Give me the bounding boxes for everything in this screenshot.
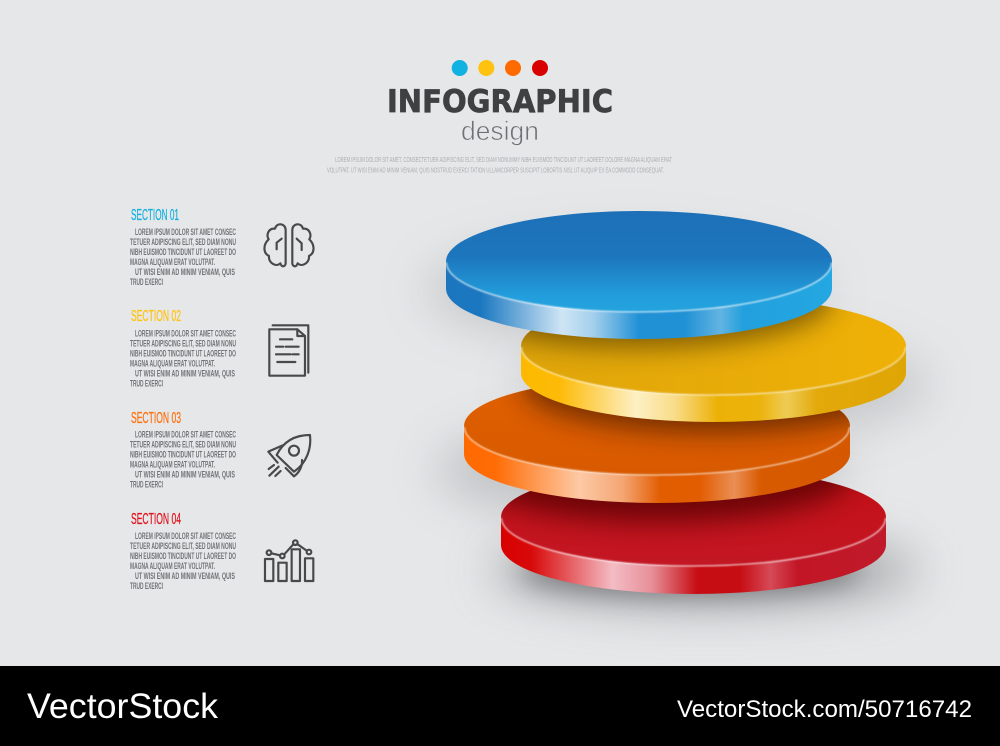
section 02 text <box>130 328 236 388</box>
footer bar <box>0 666 1000 746</box>
section 03 text: LOREM IPSUM DOLOR SIT AMET CONSEC <box>135 430 236 440</box>
section 04 text: MAGNA ALIQUAM ERAT VOLUTPAT. <box>130 561 215 571</box>
section 04 <box>130 511 313 591</box>
icon: brain <box>264 224 314 266</box>
header dots <box>452 60 548 76</box>
section 02 text: NIBH EUISMOD TINCIDUNT UT LAOREET DO <box>130 348 236 358</box>
section 03 heading: SECTION 03 <box>131 410 181 427</box>
section 04 text <box>130 531 236 591</box>
subtitle: design <box>461 116 539 146</box>
icon: document <box>269 325 308 376</box>
intro text: VOLUTPAT. UT WISI ENIM AD MINIM VENIAM, QUIS NOSTRUD EXERCI TATION ULLAMCORPER SUSCIPIT LOBORTIS NISL UT ALIQUIP EX EA COMMODO CONSEQUAT. <box>327 166 664 174</box>
section 01 text: NIBH EUISMOD TINCIDUNT UT LAOREET DO <box>130 247 236 257</box>
section 01 text <box>130 227 236 287</box>
section 03 text: TRUD EXERCI <box>130 480 163 490</box>
orange disc <box>464 388 850 503</box>
section 03 <box>130 410 310 490</box>
section 02 text: MAGNA ALIQUAM ERAT VOLUTPAT. <box>130 358 215 368</box>
intro text <box>327 155 672 174</box>
section 04 text: LOREM IPSUM DOLOR SIT AMET CONSEC <box>135 531 236 541</box>
blue disc <box>446 211 832 339</box>
section 04 text: TETUER ADIPISCING ELIT, SED DIAM NONU <box>130 541 236 551</box>
section 04 text: NIBH EUISMOD TINCIDUNT UT LAOREET DO <box>130 551 236 561</box>
section 04 heading: SECTION 04 <box>131 511 181 528</box>
footer logo: VectorStock <box>27 687 219 726</box>
section 02 text: TETUER ADIPISCING ELIT, SED DIAM NONU <box>130 338 236 348</box>
intro text: LOREM IPSUM DOLOR SIT AMET, CONSECTETUER ADIPISCING ELIT, SED DIAM NONUMMY NIBH EUISMOD TINCIDUNT UT LAOREET DOLORE MAGNA ALIQUAM ERAT <box>335 155 672 164</box>
section 03 text: TETUER ADIPISCING ELIT, SED DIAM NONU <box>130 440 236 450</box>
section 01 text: LOREM IPSUM DOLOR SIT AMET CONSEC <box>135 227 236 237</box>
section 01 heading: SECTION 01 <box>131 207 179 224</box>
section 02 text: LOREM IPSUM DOLOR SIT AMET CONSEC <box>135 328 236 338</box>
section 03 text: NIBH EUISMOD TINCIDUNT UT LAOREET DO <box>130 450 236 460</box>
icon: rocket <box>268 435 310 476</box>
footer url: VectorStock.com/50716742 <box>677 696 972 723</box>
section 02 text: UT WISI ENIM AD MINIM VENIAM, QUIS <box>135 368 235 378</box>
title: INFOGRAPHIC <box>387 84 613 120</box>
section 03 text: UT WISI ENIM AD MINIM VENIAM, QUIS <box>135 470 235 480</box>
stacked discs chart <box>425 211 930 608</box>
soft shadows on background <box>425 240 930 608</box>
red disc <box>500 480 886 594</box>
section 02 text: TRUD EXERCI <box>130 378 163 388</box>
section 01 text: TETUER ADIPISCING ELIT, SED DIAM NONU <box>130 237 236 247</box>
section 04 text: UT WISI ENIM AD MINIM VENIAM, QUIS <box>135 571 235 581</box>
section 04 text: TRUD EXERCI <box>130 581 163 591</box>
section 01 text: TRUD EXERCI <box>130 277 163 287</box>
section 02 <box>130 308 308 388</box>
section 01 text: UT WISI ENIM AD MINIM VENIAM, QUIS <box>135 267 235 277</box>
section 03 text <box>130 430 236 490</box>
yellow disc <box>520 305 906 422</box>
section 03 text: MAGNA ALIQUAM ERAT VOLUTPAT. <box>130 460 215 470</box>
section 02 heading: SECTION 02 <box>131 308 181 325</box>
section 01 <box>130 207 314 287</box>
icon: bar chart with trend line <box>265 540 313 581</box>
section 01 text: MAGNA ALIQUAM ERAT VOLUTPAT. <box>130 257 215 267</box>
